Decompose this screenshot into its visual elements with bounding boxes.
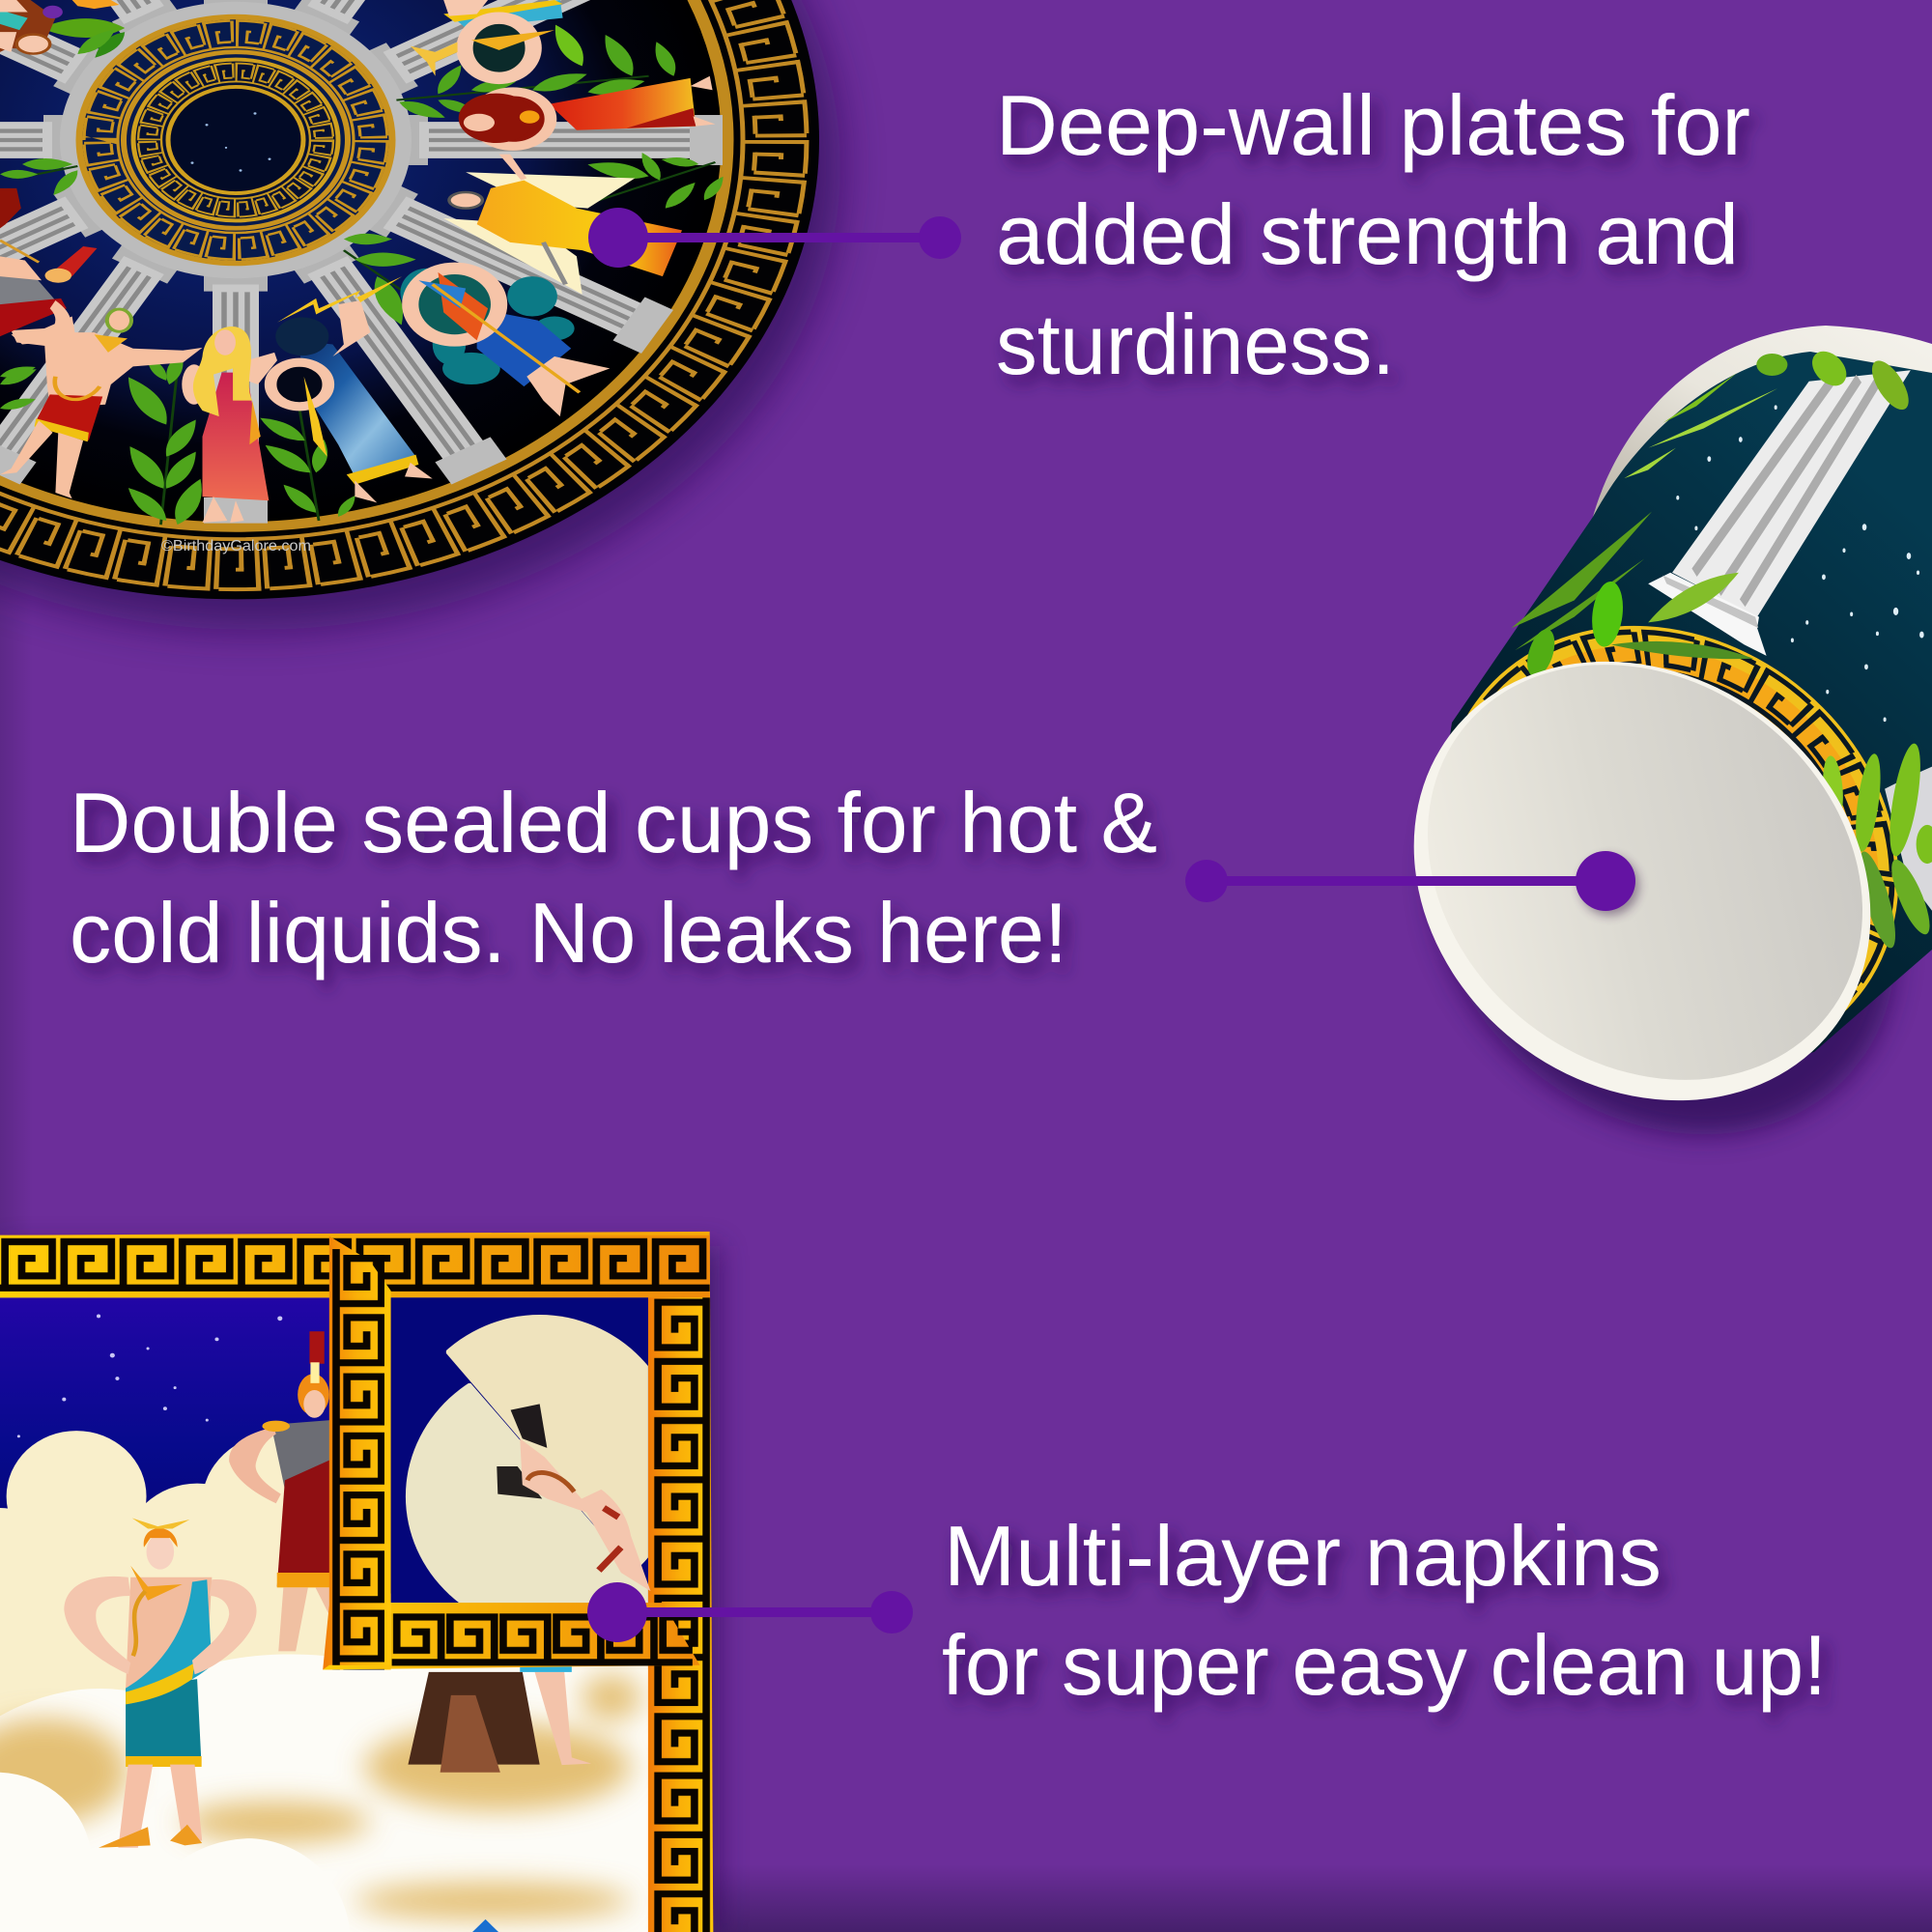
figure: Apollo with lyre <box>0 309 203 498</box>
foreground white clouds <box>0 1773 350 1932</box>
outer greek key border <box>0 0 807 589</box>
top greek key border <box>0 1236 710 1297</box>
figure: Zeus with lightning <box>270 276 433 502</box>
soldier figure <box>229 1331 331 1651</box>
cup leaves <box>1512 345 1932 954</box>
cup rim <box>1593 326 1932 517</box>
stars <box>1676 405 1924 722</box>
text block: plates: added strength and <box>996 186 1739 282</box>
napkin shadow <box>0 1246 720 1932</box>
white cloud mass <box>0 1654 648 1932</box>
flap inner sky <box>391 1297 648 1603</box>
callout pointer: cup <box>1185 851 1639 916</box>
flap vertical border <box>323 1236 391 1669</box>
cup base disc <box>1325 571 1932 1191</box>
cup body <box>1430 352 1932 1092</box>
column spokes <box>0 0 723 524</box>
plate shadow <box>0 0 840 630</box>
text block: cups: cold liquids. No leaks here! <box>70 885 1067 980</box>
figure: blue sea god with trident <box>400 269 610 416</box>
flap figure fragment <box>497 1404 650 1591</box>
figure: Hermes at top right <box>411 0 563 78</box>
cup shadow <box>1344 600 1932 1226</box>
clouds <box>0 1431 350 1757</box>
text block: cups: Double sealed cups for hot & <box>70 775 1157 870</box>
greek key band on cup <box>1466 626 1898 1012</box>
olive branches <box>0 18 728 527</box>
text block: napkins: for super easy clean up! <box>942 1617 1827 1713</box>
figure: red robed goddess <box>459 76 715 146</box>
callout pointer: plate <box>588 208 961 268</box>
text block: plates: sturdiness. <box>996 297 1395 392</box>
text block: plates <box>996 77 1750 392</box>
central medallion <box>60 2 412 278</box>
panel: paper cup <box>1414 326 1932 1148</box>
plate disc with rings and spokes <box>0 0 819 599</box>
plate illustrations: gods and olive branches <box>0 0 728 527</box>
folded corner flap <box>323 1236 703 1669</box>
napkin stars <box>17 1315 282 1437</box>
text block: plates: Deep-wall plates for <box>996 77 1750 173</box>
callout pointer: napkin <box>587 1582 913 1642</box>
brown skirt legs <box>408 1662 591 1773</box>
figure: yellow winged goddess <box>443 155 682 295</box>
text block: napkins: Multi-layer napkins <box>944 1508 1662 1604</box>
text block: cups <box>70 775 1157 980</box>
figure: Ares at left edge <box>0 188 97 345</box>
tan watercolour washes <box>0 1674 640 1919</box>
panel: deep-wall plate <box>0 0 840 630</box>
moon pieces <box>406 1315 648 1603</box>
panel: napkin <box>0 1232 720 1932</box>
right greek key border <box>648 1297 713 1932</box>
figure: Aphrodite in pink dress <box>182 327 277 523</box>
column <box>1648 370 1932 911</box>
watermark text: ©BirthdayGalore.com <box>161 538 311 554</box>
Hermes figure <box>64 1519 257 1848</box>
napkin base sheet <box>0 1232 713 1932</box>
cup artwork in cup coordinates <box>1512 345 1932 954</box>
flap bottom border <box>323 1603 699 1669</box>
text block: napkins <box>942 1508 1827 1713</box>
blue tip <box>472 1919 498 1932</box>
figure: Dionysus at top left <box>0 0 119 54</box>
